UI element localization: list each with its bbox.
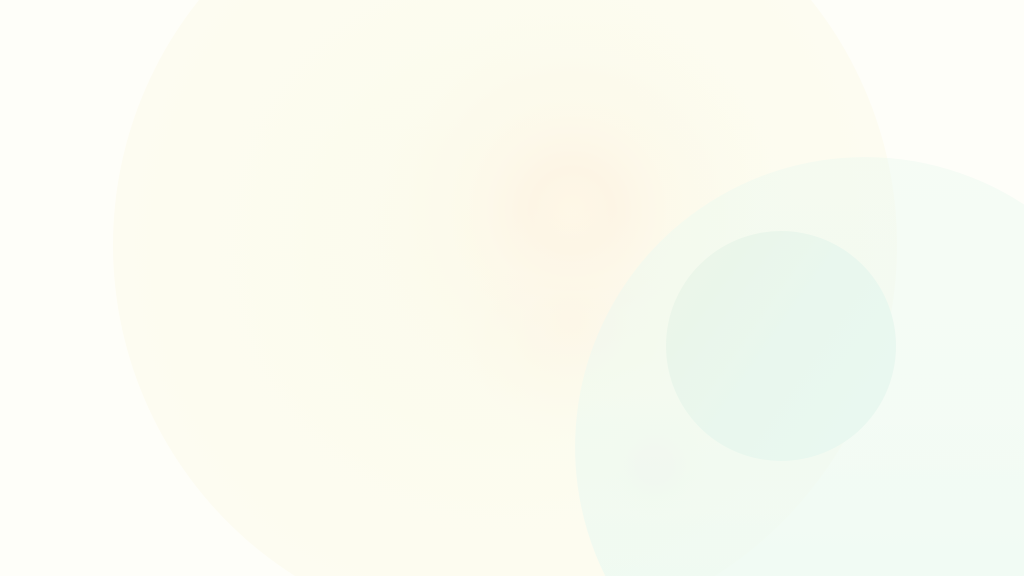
inner teal circle bbox=[666, 231, 896, 461]
warm central glow bbox=[367, 5, 777, 415]
large teal circle bbox=[575, 157, 1024, 576]
warm lower lobe bbox=[450, 200, 690, 440]
large cream circle bbox=[113, 0, 897, 576]
soft smudge in teal circle bbox=[600, 410, 710, 520]
